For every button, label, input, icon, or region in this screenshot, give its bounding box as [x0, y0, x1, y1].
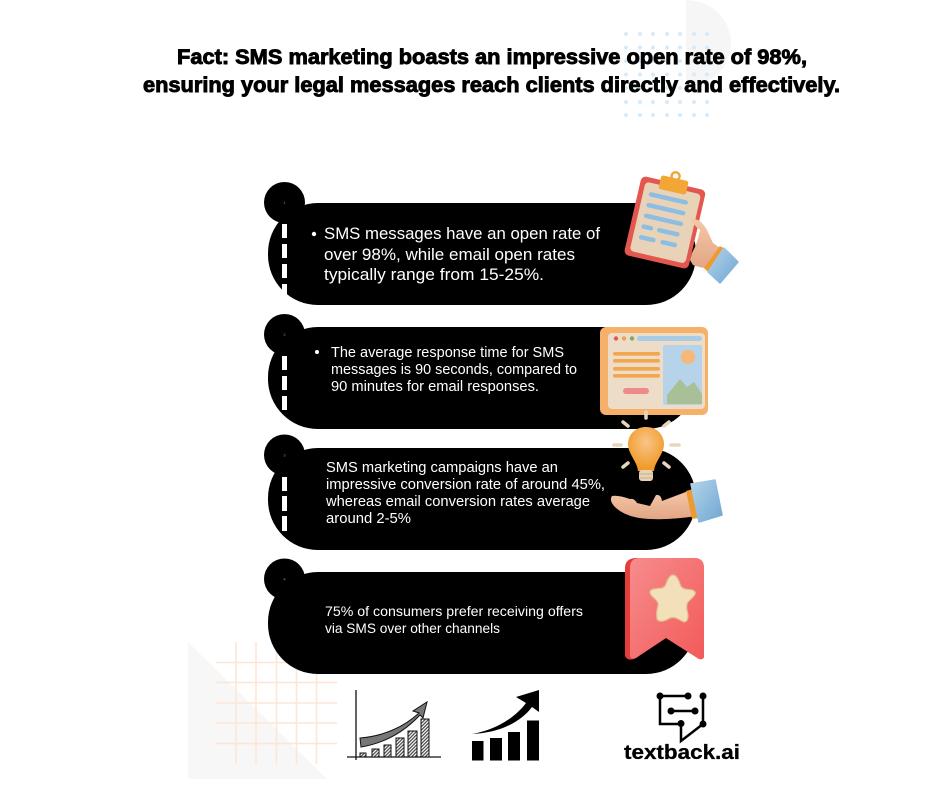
logo wordmark: textback.ai	[624, 742, 740, 764]
fact 2 text	[315, 345, 577, 395]
title: ensuring your legal messages reach clients directly and effectively.	[143, 74, 840, 97]
icon: solid growth chart	[472, 690, 539, 760]
fact 4 text: 75% of consumers prefer receiving offers	[325, 603, 583, 619]
timeline dashes 2	[282, 356, 287, 410]
panel: fact 1	[264, 182, 696, 305]
icon: clipboard held by hand	[624, 165, 738, 283]
fact 1 text: SMS messages have an open rate of	[324, 224, 600, 243]
icon: sketched growth chart	[347, 690, 441, 760]
title: Fact: SMS marketing boasts an impressive open rate of 98%,	[177, 46, 807, 69]
title	[143, 46, 840, 97]
panel: fact 2	[264, 314, 696, 429]
fact 4 text	[325, 603, 583, 636]
fact 3 text: whereas email conversion rates average	[325, 494, 590, 510]
fact 2 text: 90 minutes for email responses.	[331, 379, 539, 395]
panel: fact 3	[264, 434, 696, 550]
decoration: top grey half circle and dots	[624, 0, 731, 117]
timeline dashes 1	[282, 224, 287, 294]
panel: fact 4	[264, 558, 696, 674]
number badge 2: 2	[283, 332, 286, 337]
fact 2 text: messages is 90 seconds, compared to	[331, 362, 577, 378]
logo mark	[656, 692, 706, 741]
fact 3 text: SMS marketing campaigns have an	[326, 460, 558, 476]
fact 1 text: over 98%, while email open rates	[324, 245, 575, 264]
number badge 3	[264, 434, 305, 476]
number badge 4	[264, 558, 305, 600]
fact 1 text	[312, 224, 600, 284]
logo: textback.ai	[624, 692, 740, 764]
number badge 1	[264, 182, 305, 223]
timeline dashes 3	[282, 477, 287, 531]
decoration: bottom-left triangle and grid	[188, 642, 337, 779]
fact 3 text	[325, 460, 605, 527]
fact 3 text: around 2-5%	[326, 511, 411, 527]
icon: light bulb over open hand	[611, 412, 722, 522]
fact 1 text: typically range from 15-25%.	[324, 265, 544, 284]
icon: red bookmark with star	[625, 558, 704, 660]
fact 3 text: impressive conversion rate of around 45%,	[326, 477, 605, 493]
number badge 4: 4	[283, 576, 286, 582]
number badge 3: 3	[283, 452, 286, 458]
number badge 2	[264, 314, 305, 355]
fact 4 text: via SMS over other channels	[325, 620, 500, 636]
number badge 1: 1	[283, 200, 286, 205]
fact 2 text: The average response time for SMS	[331, 345, 564, 361]
icon: browser window	[600, 327, 708, 415]
